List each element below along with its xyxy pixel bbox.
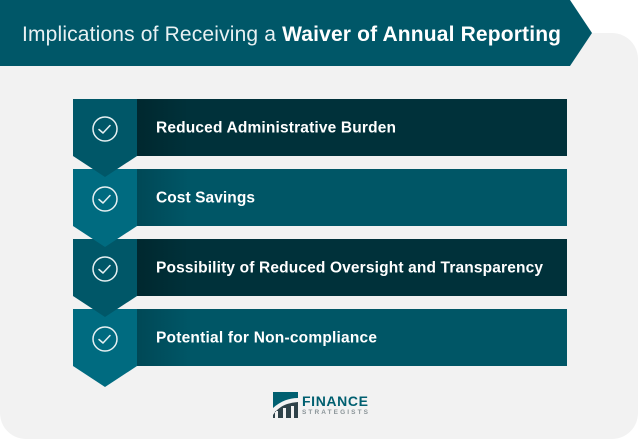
- icon: check circle: [93, 187, 117, 211]
- row 2: cost savings: [73, 169, 567, 247]
- label: Potential for Non-compliance: [156, 330, 377, 346]
- title banner: [0, 0, 592, 66]
- icon: check circle: [93, 257, 117, 281]
- title: Implications of Receiving a Waiver of Annual Reporting: [22, 23, 561, 46]
- logo: finance strategists: [273, 392, 369, 418]
- logo mark: [273, 392, 298, 418]
- label: Reduced Administrative Burden: [156, 120, 396, 136]
- row 3: reduced oversight: [73, 239, 567, 317]
- icon: check circle: [93, 117, 117, 141]
- logo wordmark: FINANCE: [302, 393, 368, 409]
- row 1: reduced administrative burden: [73, 99, 567, 177]
- logo: finance strategists: STRATEGISTS: [302, 409, 369, 416]
- row 4: potential for non-compliance: [73, 309, 567, 387]
- label: Cost Savings: [156, 190, 255, 206]
- label: Possibility of Reduced Oversight and Transparency: [156, 260, 543, 276]
- icon: check circle: [93, 327, 117, 351]
